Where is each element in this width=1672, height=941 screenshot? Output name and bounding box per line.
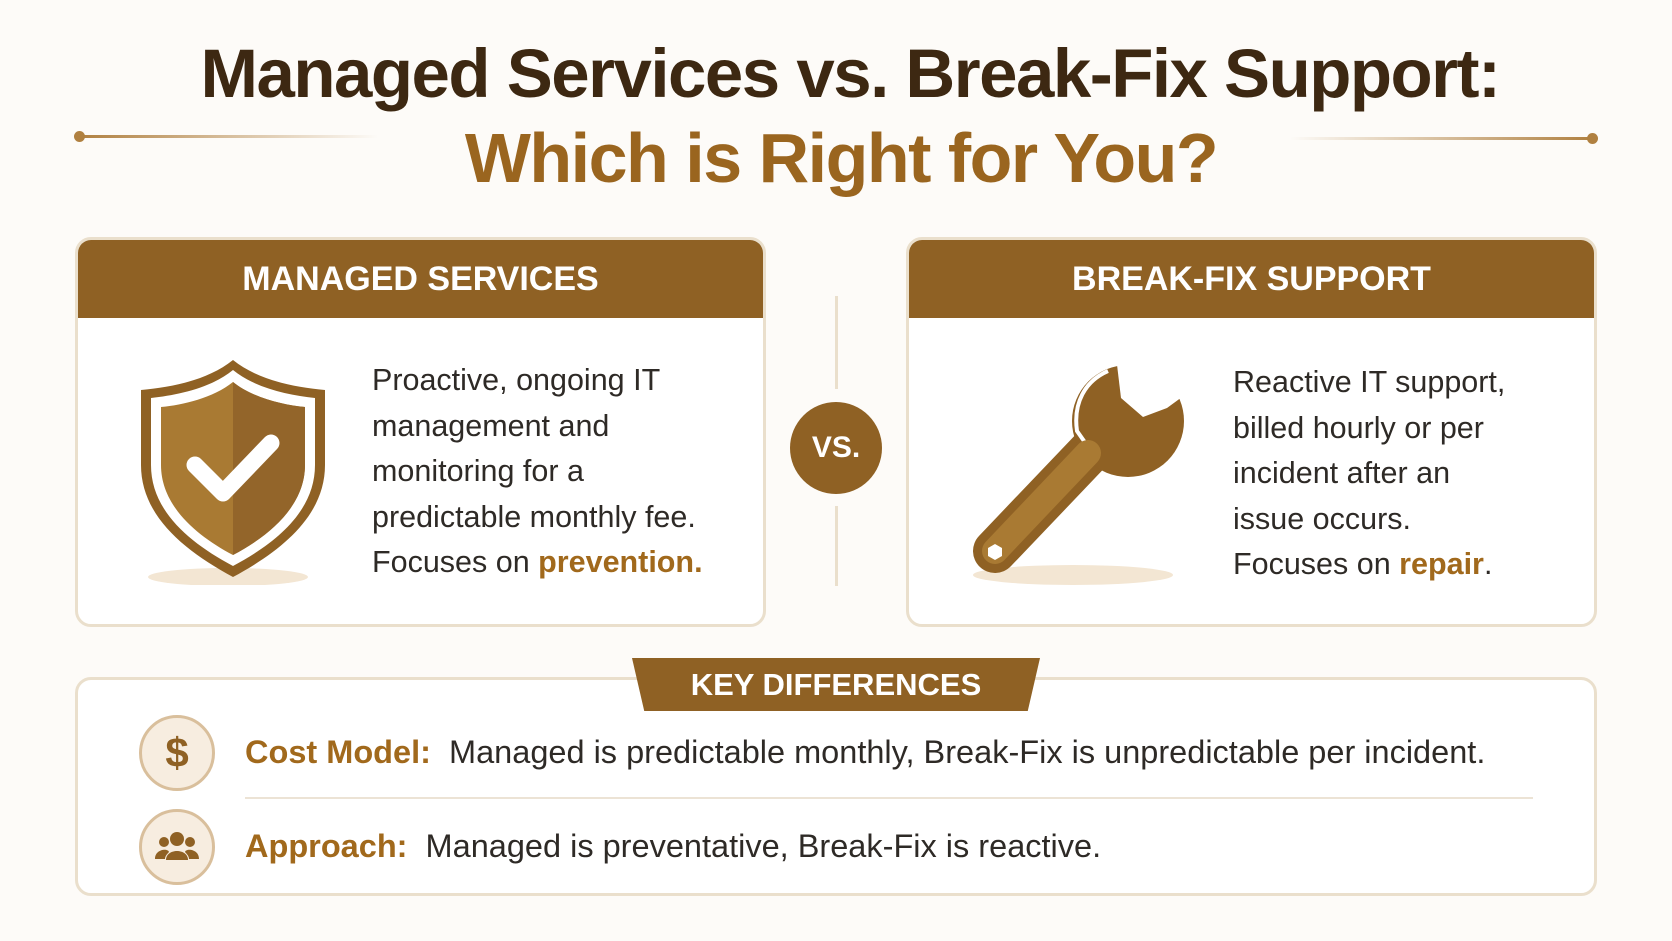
row: approach: Approach: Managed is preventative, Break-Fix is reactive. [245, 828, 1101, 864]
row: cost model: Cost Model: Managed is predictable monthly, Break-Fix is unpredictable per incident. [245, 734, 1485, 770]
text: break-fix description: incident after an [1233, 456, 1450, 490]
panel: break-fix support [906, 237, 1597, 627]
icon: people [139, 809, 215, 885]
text: managed description: Focuses on prevention. [372, 545, 703, 579]
vs divider [790, 296, 882, 586]
icon: shield [141, 360, 325, 585]
heading: managed services [78, 240, 763, 318]
text: break-fix description: Focuses on repair. [1233, 547, 1492, 581]
vs badge [790, 402, 882, 494]
heading: break-fix support: BREAK-FIX SUPPORT [1072, 260, 1431, 298]
title: Managed Services vs. Break-Fix Support: [201, 35, 1499, 112]
heading: managed services: MANAGED SERVICES [242, 260, 599, 298]
decorative line left [78, 135, 378, 138]
vs badge: VS. [812, 431, 860, 464]
icon: dollar: $ [165, 729, 189, 776]
text: break-fix description: billed hourly or per [1233, 410, 1484, 444]
text: break-fix description [1233, 365, 1505, 581]
text: managed description: management and [372, 408, 609, 442]
heading tab: key differences [632, 658, 1040, 711]
panel: key differences [75, 658, 1597, 896]
panel: managed services [75, 237, 766, 627]
icon: dollar [139, 715, 215, 791]
text: managed description: Proactive, ongoing IT [372, 363, 660, 397]
text: managed description: monitoring for a [372, 454, 584, 488]
text: managed description: predictable monthly fee. [372, 500, 696, 534]
heading: break-fix support [909, 240, 1594, 318]
icon: wrench [973, 366, 1184, 585]
text: break-fix description: issue occurs. [1233, 502, 1411, 536]
row: approach [139, 809, 1101, 885]
text: managed description [372, 363, 703, 579]
row: cost model [139, 715, 1485, 791]
text: break-fix description: Reactive IT support, [1233, 365, 1505, 399]
subtitle: Which is Right for You? [465, 119, 1217, 197]
heading tab: key differences: KEY DIFFERENCES [691, 667, 981, 702]
decorative line right [1290, 137, 1594, 140]
